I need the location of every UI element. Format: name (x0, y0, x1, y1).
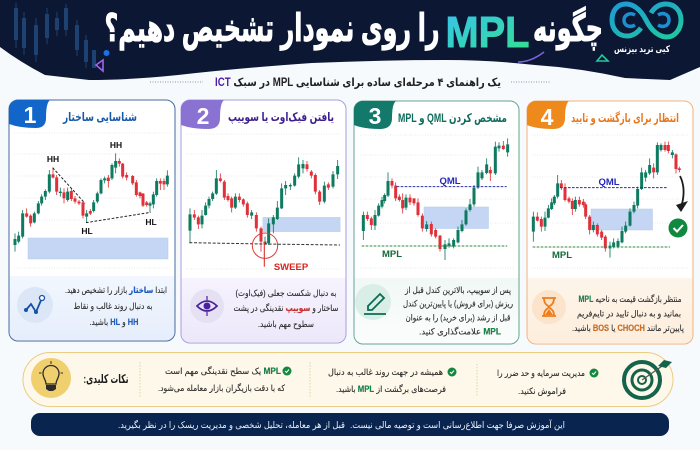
blue zone (424, 207, 488, 228)
heading: مشخص کردن QML و MPL (398, 111, 507, 126)
body text: منتظر بازگشت قیمت به ناحیه MPL (578, 294, 682, 304)
icon: light bulb (31, 358, 71, 398)
body text: قبل از رشد (برای خرید) را به عنوان (406, 312, 510, 322)
decorative candles (16, 3, 94, 68)
key point 1 (158, 366, 292, 393)
key point 2: همیشه در جهت روند غالب به دنبال (328, 367, 443, 377)
step number tab: 3 (369, 103, 381, 129)
body text: بمانید و به دنبال تایید در تایم‌فریم (577, 308, 681, 320)
step number tab: 1 (24, 102, 37, 128)
panel: step 4 wait and confirm (527, 101, 693, 344)
header banner (0, 0, 700, 80)
candlestick chart (189, 157, 340, 267)
key point 2 (328, 367, 456, 394)
icon: hourglass (532, 290, 566, 324)
candlestick chart (533, 142, 679, 258)
body text: ساختار و سوییپ نقدینگی در پشت (234, 303, 338, 314)
QML label: QML (439, 176, 461, 187)
liquidity zone (28, 238, 168, 259)
body text (403, 285, 513, 336)
body text: به دنبال شکست جعلی (فیک‌اوت) (236, 288, 336, 298)
key point 1: MPL یک سطح نقدینگی مهم است (165, 366, 282, 377)
candlestick chart (362, 138, 508, 260)
panel: step 3 QML and MPL (354, 101, 519, 344)
step number tab (9, 100, 50, 128)
icon: purple triangle (96, 60, 103, 71)
icon: eye (190, 289, 224, 323)
icon: confirmation check (668, 218, 688, 238)
key point 1: که با دقت بازیگران بازار معامله می‌شود. (158, 383, 286, 393)
icon: teal triangle (597, 55, 608, 61)
panel: step 2 sweep (181, 100, 346, 343)
step number tab: 4 (541, 104, 554, 130)
QML label: QML (598, 177, 620, 188)
body text: ریزش (برای فروش) یا پایین‌ترین کندل (403, 298, 513, 308)
candlestick chart (15, 153, 167, 252)
step number tab (527, 101, 569, 130)
key point 3: فراموش نکنید. (518, 386, 566, 396)
title (104, 6, 603, 57)
step number tab (181, 100, 224, 129)
disclaimer bar (31, 413, 669, 436)
logo (612, 4, 681, 55)
key point 3 (497, 368, 598, 396)
chart labels: HL (81, 226, 93, 236)
icon: target (624, 360, 672, 398)
chart labels: HH (47, 154, 59, 164)
sweep marker (252, 233, 278, 267)
chart labels (47, 140, 157, 236)
heading: شناسایی ساختار (62, 110, 137, 124)
body text: HH و HL باشید. (90, 317, 138, 327)
subtitle: یک راهنمای ۴ مرحله‌ای ساده برای شناسایی MPL در سبک ICT (215, 77, 501, 89)
icon: pen (355, 284, 391, 320)
MPL label: MPL (382, 249, 402, 260)
blue zone (262, 217, 340, 232)
key point 2: فرصت‌های برگشت از MPL باشید. (336, 384, 446, 394)
key points box (23, 352, 673, 406)
title word: how: چگونه (533, 6, 603, 50)
blue zone (591, 209, 652, 230)
chart labels: HL (145, 217, 157, 227)
panel: step 1 structure (9, 100, 175, 341)
body text (572, 294, 684, 333)
disclaimer text part 1: این آموزش صرفا جهت اطلاع‌رسانی است و توصیه مالی نیست. (350, 419, 565, 430)
key point 3: مدیریت سرمایه و حد ضرر را (497, 368, 585, 378)
body text: MPL علامت‌گذاری کنید. (419, 326, 502, 336)
step number tab: 2 (197, 103, 209, 129)
heading: یافتن فیک‌اوت یا سوییپ (228, 110, 334, 125)
swoosh (518, 52, 544, 62)
body text: ابتدا ساختار بازار را تشخیص دهید. (65, 285, 167, 296)
body text: سطوح مهم باشید. (258, 319, 314, 330)
MPL label: MPL (552, 250, 572, 261)
logo text: کیی ترید بیزنس (614, 44, 671, 55)
icon: line chart (17, 287, 53, 323)
body text: پایین‌تر مانند CHOCH یا BOS باشید. (572, 323, 684, 333)
icon: blue dot (104, 50, 110, 56)
sweep label: SWEEP (274, 262, 309, 273)
body text (65, 285, 167, 327)
body text: پس از سوییپ، بالاترین کندل قبل از (404, 285, 511, 295)
step number tab (354, 101, 396, 129)
body text (234, 288, 338, 330)
body text: به دنبال روند غالب و نقاط (74, 301, 152, 311)
key points label: نکات کلیدی: (84, 372, 128, 386)
title remainder: را روی نمودار تشخیص دهیم؟ (104, 8, 440, 51)
chart labels: HH (110, 140, 122, 150)
arrow: downward (676, 176, 688, 212)
disclaimer text part 2: قبل از هر معامله، تحلیل شخصی و مدیریت ریسک را در نظر بگیرید. (118, 419, 345, 430)
title word: MPL: MPL (446, 8, 530, 57)
